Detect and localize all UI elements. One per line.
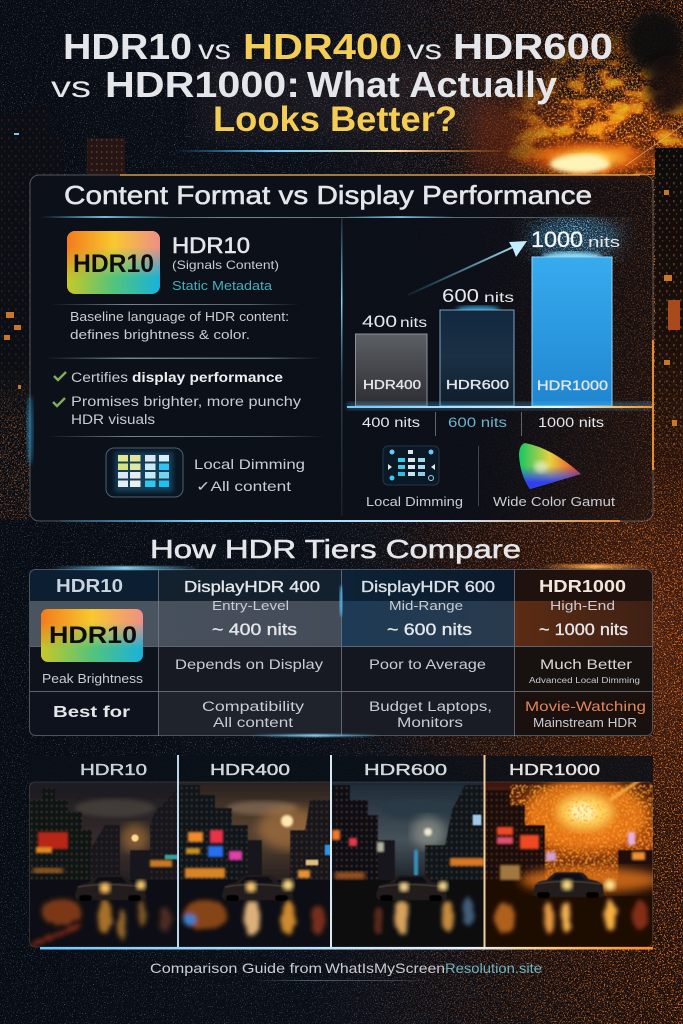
column: DisplayHDR 400: All content bbox=[213, 715, 293, 730]
bar: HDR600: 600 bbox=[442, 285, 479, 306]
title bbox=[51, 26, 613, 139]
nits scale row: 600 nits bbox=[448, 415, 507, 430]
column: DisplayHDR 400: Compatibility bbox=[202, 699, 304, 714]
bar: HDR400: HDR400 bbox=[363, 377, 421, 392]
label: HDR600: HDR600 bbox=[364, 762, 448, 779]
checklist: HDR visuals bbox=[71, 412, 155, 427]
footer credit: Resolution.site bbox=[445, 960, 542, 976]
column: HDR1000: Movie-Watching bbox=[525, 698, 646, 714]
title: HDR1000: bbox=[105, 64, 300, 105]
column: DisplayHDR 400 bbox=[175, 579, 323, 730]
icon: colour gamut bbox=[519, 443, 581, 489]
checklist: Certifies bbox=[71, 370, 128, 385]
bar: HDR600: HDR600 bbox=[446, 377, 509, 392]
city silhouettes bbox=[0, 105, 683, 548]
bar: HDR1000: 1000 bbox=[531, 227, 583, 252]
column: DisplayHDR 600: Mid-Range bbox=[389, 599, 463, 613]
column: DisplayHDR 400: Entry-Level bbox=[212, 599, 289, 613]
title: vs bbox=[51, 71, 91, 104]
heading: how HDR tiers compare: How HDR Tiers Compare bbox=[150, 534, 521, 564]
panel: content format vs display performance bbox=[27, 174, 654, 522]
column: HDR1000: Much Better bbox=[540, 656, 632, 672]
column: HDR1000: Advanced Local Dimming bbox=[529, 676, 640, 685]
column: DisplayHDR 600: Budget Laptops, bbox=[369, 699, 492, 714]
bar: HDR1000 bbox=[531, 227, 620, 406]
column: HDR1000 bbox=[525, 576, 646, 730]
title: vs bbox=[407, 34, 442, 65]
bar: HDR400 bbox=[356, 313, 427, 406]
table row shading bbox=[30, 570, 653, 735]
bar: HDR400: 400 bbox=[362, 313, 397, 331]
icon: local dimming array bbox=[383, 446, 439, 485]
column: DisplayHDR 600: Monitors bbox=[397, 715, 463, 730]
column: HDR10: Peak Brightness bbox=[42, 672, 143, 686]
label: HDR10: HDR10 bbox=[80, 762, 147, 779]
icon: local dimming grid bbox=[106, 448, 183, 497]
column: DisplayHDR 400: ~ 400 nits bbox=[212, 620, 297, 639]
baseline bbox=[347, 402, 653, 410]
bar: HDR400: nits bbox=[400, 315, 427, 330]
column: DisplayHDR 600 bbox=[361, 579, 495, 730]
label: HDR1000: HDR1000 bbox=[509, 762, 601, 779]
local dimming label: Local Dimming bbox=[194, 456, 305, 472]
label: HDR400: HDR400 bbox=[210, 762, 290, 779]
column: DisplayHDR 400: DisplayHDR 400 bbox=[184, 579, 320, 596]
checklist: display performance bbox=[132, 370, 284, 385]
title: HDR10 bbox=[63, 26, 192, 67]
icon: HDR10 logo small: HDR10 bbox=[49, 622, 137, 649]
title: Looks Better? bbox=[213, 100, 457, 139]
column: HDR1000: High-End bbox=[550, 599, 615, 613]
bar: HDR1000: nits bbox=[588, 234, 620, 251]
bar: HDR600: nits bbox=[484, 289, 514, 305]
title: What Actually bbox=[307, 64, 557, 105]
local dimming caption: Local Dimming bbox=[366, 495, 463, 509]
nits scale row: 400 nits bbox=[362, 415, 420, 430]
icon: HDR10 logo bbox=[67, 231, 160, 294]
HDR10 description: Baseline language of HDR content: bbox=[70, 309, 289, 324]
column: HDR10: HDR10 bbox=[56, 576, 123, 596]
scene: HDR1000 bbox=[485, 778, 660, 947]
footer credit: Comparison Guide from bbox=[150, 960, 322, 976]
HDR10 heading block: Static Metadata bbox=[172, 279, 272, 293]
title: HDR600 bbox=[453, 26, 613, 67]
HDR10 heading block bbox=[172, 233, 279, 293]
nits scale row: 1000 nits bbox=[538, 415, 604, 430]
nits scale row bbox=[362, 412, 604, 436]
column: DisplayHDR 600: DisplayHDR 600 bbox=[361, 579, 495, 596]
HDR10 description: defines brightness & color. bbox=[70, 327, 250, 342]
title divider glow bbox=[174, 150, 514, 152]
title: vs bbox=[198, 34, 231, 65]
bar: HDR1000: HDR1000 bbox=[537, 378, 608, 393]
bar chart: peak brightness bbox=[347, 218, 653, 410]
footer credit: WhatIsMyScreen bbox=[325, 960, 445, 976]
panel heading: Content Format vs Display Performance bbox=[64, 180, 592, 210]
icon: HDR10 logo small bbox=[41, 609, 143, 662]
column: HDR10 bbox=[41, 576, 143, 721]
arrow: rising brightness bbox=[408, 241, 527, 295]
scene: HDR600 bbox=[332, 782, 484, 947]
icon: HDR10 logo: HDR10 bbox=[73, 250, 154, 278]
title: HDR400 bbox=[243, 26, 402, 67]
explosion bbox=[470, 10, 683, 182]
footer credit bbox=[150, 960, 542, 976]
wide color gamut caption: Wide Color Gamut bbox=[493, 495, 616, 509]
HDR10 heading block: (Signals Content) bbox=[172, 258, 279, 272]
local dimming label: ✓All content bbox=[196, 478, 291, 494]
scene: HDR400 bbox=[179, 782, 331, 947]
comparison table bbox=[29, 564, 653, 737]
checklist: Promises brighter, more punchy bbox=[71, 394, 301, 409]
column: DisplayHDR 600: ~ 600 nits bbox=[387, 620, 472, 639]
HDR10 description bbox=[70, 309, 289, 342]
checklist bbox=[53, 370, 301, 427]
scene: HDR10 bbox=[29, 782, 178, 947]
column: DisplayHDR 600: Poor to Average bbox=[369, 656, 486, 672]
column: HDR1000: HDR1000 bbox=[539, 576, 626, 596]
column: HDR1000: ~ 1000 nits bbox=[539, 620, 628, 639]
bar: HDR600 bbox=[440, 285, 514, 406]
HDR10 heading block: HDR10 bbox=[172, 233, 250, 258]
local dimming label bbox=[194, 456, 305, 494]
column: HDR1000: Mainstream HDR bbox=[533, 715, 637, 730]
column: HDR10: Best for bbox=[53, 704, 130, 721]
image comparison strip bbox=[29, 755, 660, 950]
column: DisplayHDR 400: Depends on Display bbox=[175, 656, 323, 672]
